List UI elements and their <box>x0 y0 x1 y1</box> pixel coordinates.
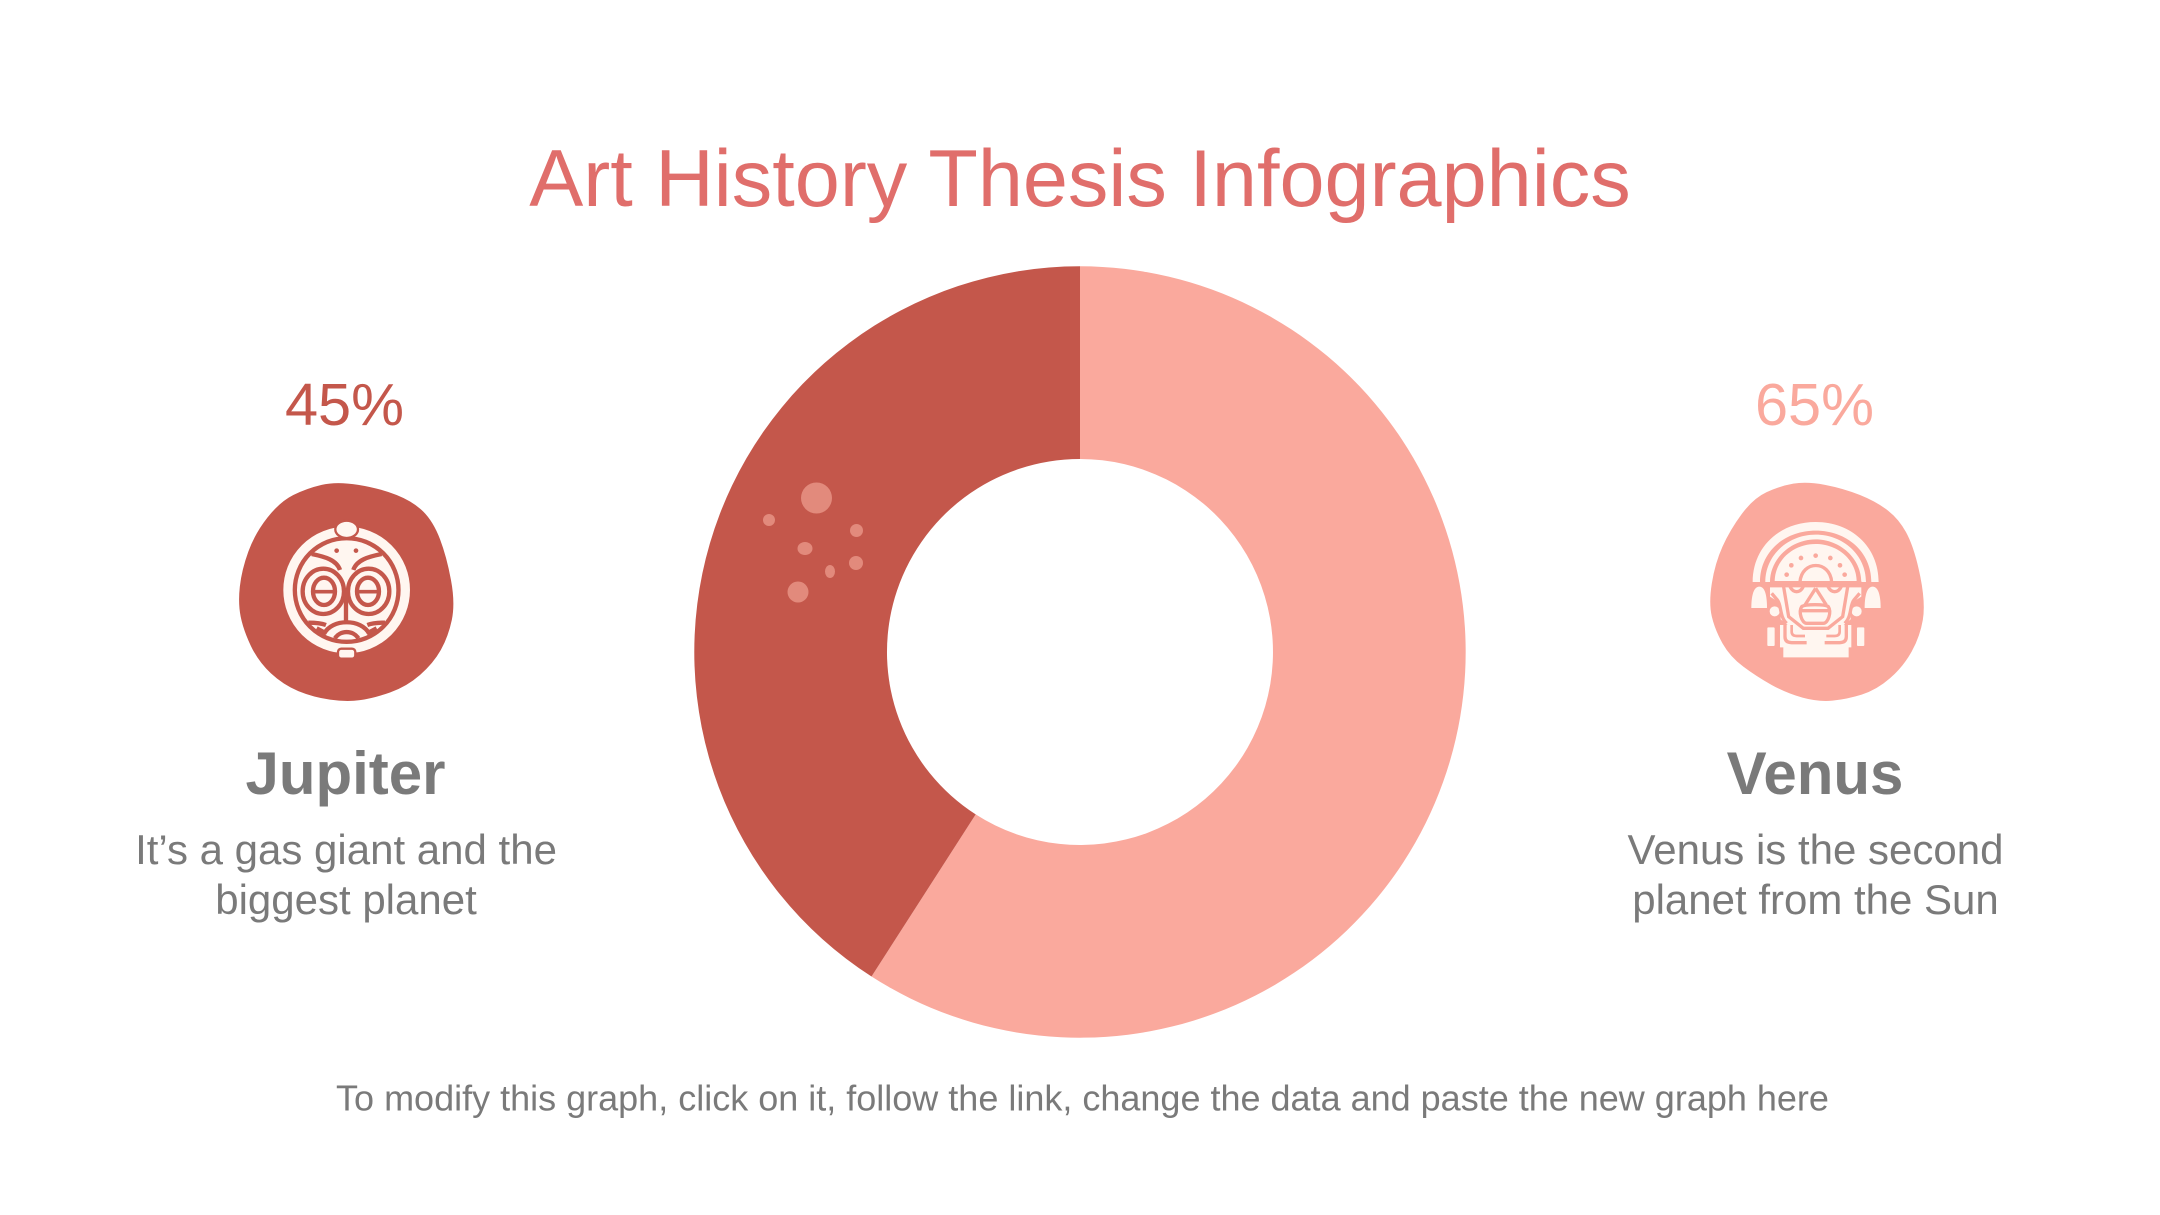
donut chart <box>694 266 1466 1038</box>
icon: Venus idol mask on blob <box>1710 483 1924 701</box>
title: Art History Thesis Infographics <box>529 134 1631 224</box>
footnote: To modify this graph, click on it, follow the link, change the data and paste the new graph here <box>336 1078 1829 1118</box>
description: Venus: planet from the Sun <box>1632 876 1999 923</box>
decorative spots <box>763 482 863 602</box>
panel: Venus <box>1628 371 2003 923</box>
description: Jupiter: biggest planet <box>215 876 477 923</box>
heading: Jupiter: Jupiter <box>245 740 446 807</box>
icon: Jupiter round mask on blob <box>239 483 453 701</box>
percentage: 65%: 65% <box>1755 371 1874 438</box>
percentage: 45%: 45% <box>285 371 404 438</box>
donut segment: Venus 65 <box>872 266 1466 1038</box>
description: Venus: Venus is the second <box>1628 826 2003 873</box>
donut segment: Jupiter 45 <box>694 266 1080 976</box>
panel: Jupiter <box>135 371 557 923</box>
blob background <box>1710 483 1924 701</box>
description: Jupiter: It’s a gas giant and the <box>135 826 557 873</box>
heading: Venus: Venus <box>1727 740 1903 807</box>
blob background <box>239 483 453 701</box>
